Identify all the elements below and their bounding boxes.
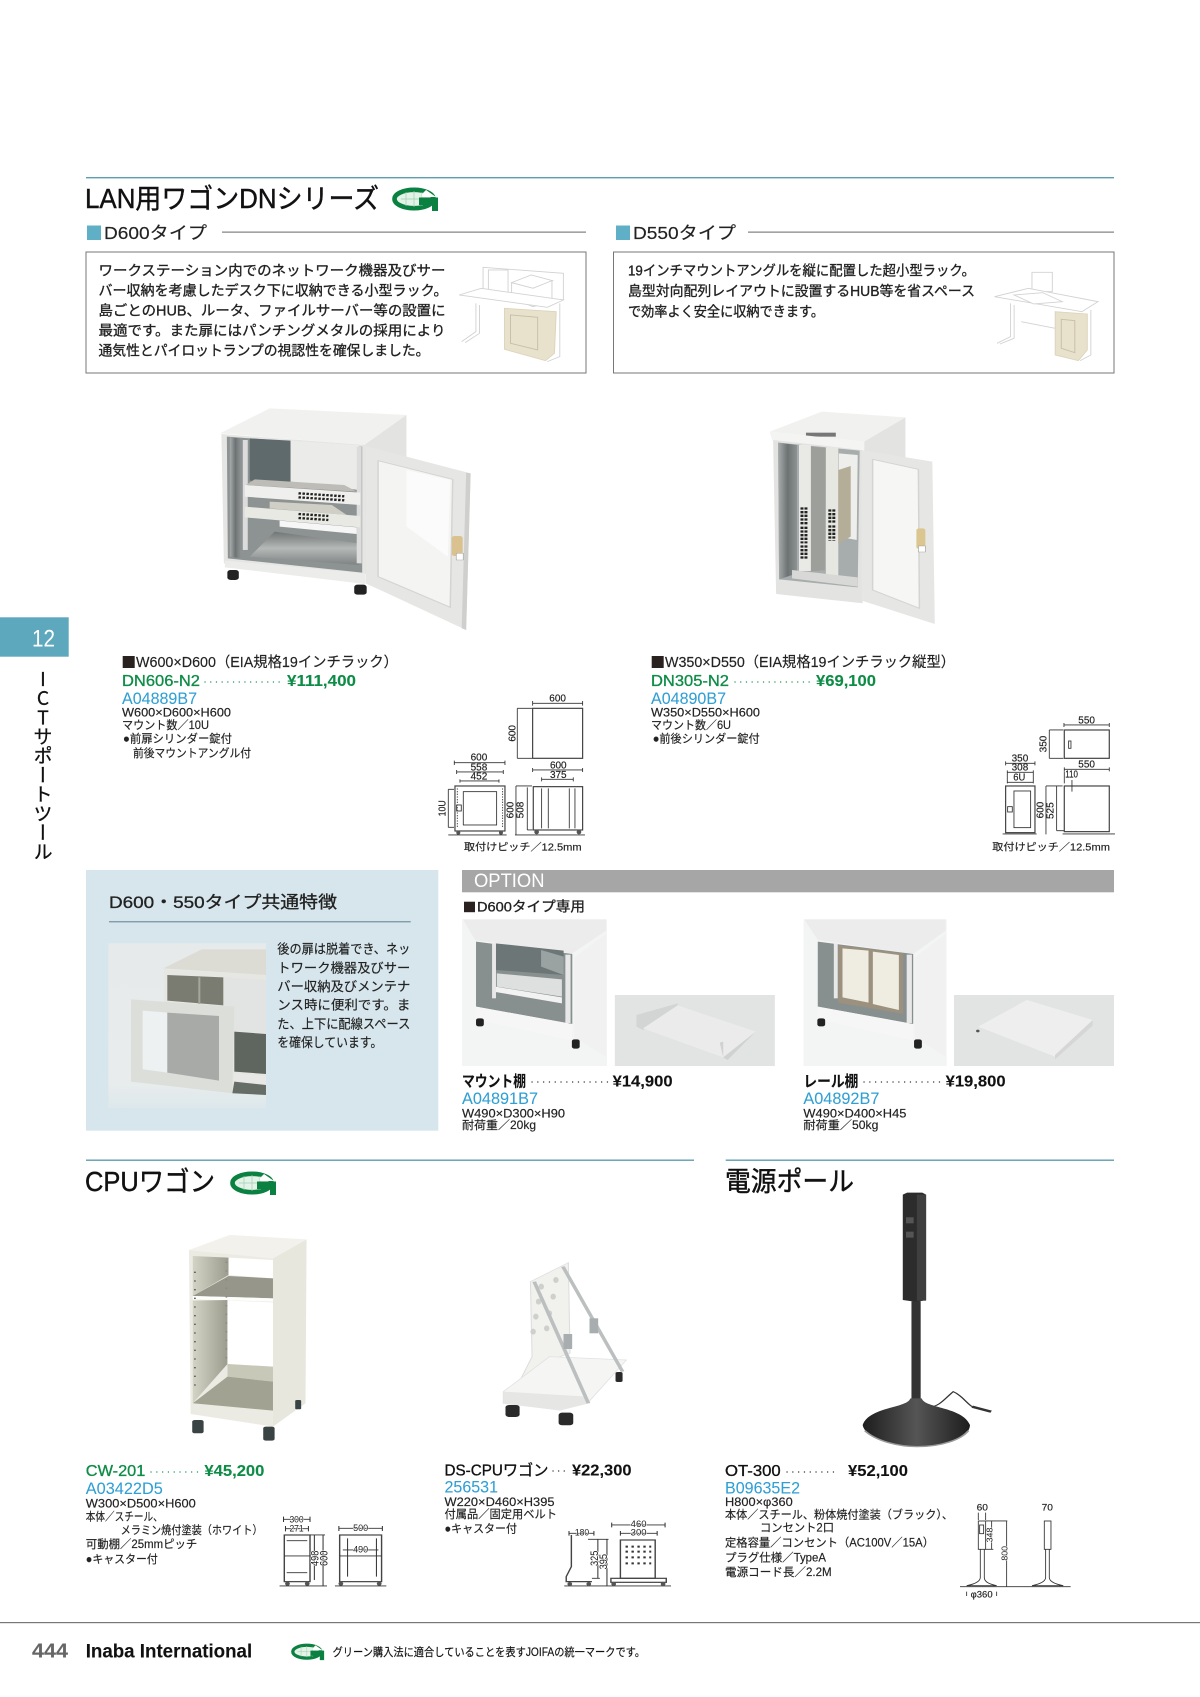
text block: D550 description: で効率よく安全に収納できます。 [628,304,824,320]
dimension drawing: DS-CPU wagon: 300 [631,1528,647,1538]
product block: CW-201: ●キャスター付 [86,1553,158,1566]
product block: rail shelf: 耐荷重／50kg [803,1118,878,1132]
dimension drawing: DN606-N2: 10U [438,800,449,816]
text block: D600 description: 島ごとのHUB、ルータ、ファイルサーバー等の設置に [98,302,445,320]
product block: CW-201 [86,1463,264,1566]
dimension drawing: DN606-N2: 600 [508,725,519,742]
product block: DN606-N2: マウント数／10U [122,718,209,732]
dimension drawing: DN305-N2: 308 [1012,763,1028,774]
dimension drawing: DN305-N2: 6U [1013,773,1025,784]
dimension drawing: DN305-N2: 525 [1045,802,1056,819]
product block: DS-CPU wagon: DS-CPUワゴン [444,1460,548,1479]
product photo: DN305-N2 vertical rack [770,412,935,624]
section rule: power pole [726,1160,1114,1161]
product block: CW-201: ¥45,200 [204,1463,264,1480]
dimension drawing: CW-201: 498 [310,1550,322,1566]
dimension drawing: OT-300: 70 [1042,1503,1053,1513]
text block: D600 description: 最適です。また扉にはパンチングメタルの採用により [98,322,446,340]
product photo: DN606-N2 open rack [220,408,471,630]
footer: green mark note: グリーン購入法に適合していることを表すJOIFAの統一マークです。 [333,1645,645,1659]
product block: OT-300: プラグ仕様／TypeA [725,1551,826,1565]
dimension drawing: DS-CPU wagon [564,1520,671,1586]
product block: rail shelf: レール棚 [803,1073,858,1091]
photo: rack with mount shelf [462,919,607,1066]
product photo: OT-300 power pole [863,1193,991,1447]
product photo: CW-201 wagon [189,1235,307,1441]
dimension drawing: DN606-N2: 375 [550,770,567,781]
dimension drawing: DN305-N2: 550 [1078,760,1095,771]
product block: CW-201: メラミン焼付塗装（ホワイト） [121,1523,263,1537]
text block: common features: た、上下に配線スペース [277,1016,410,1031]
dimension drawing: CW-201 [280,1515,386,1586]
section rule: LAN wagon [86,177,1114,178]
dimension drawing: DN305-N2: 110 [1065,770,1078,781]
text block: D600 description: ワークステーション内でのネットワーク機器及びサー [98,262,446,280]
footer rule [0,1622,1200,1623]
dimension drawing: OT-300: 60 [977,1503,988,1513]
dimension drawing: DS-CPU wagon: 460 [631,1520,647,1530]
product block: DN606-N2: W600×D600×H600 [122,707,231,720]
product block: DN305-N2: DN305-N2 [651,673,729,690]
dimension drawing: DS-CPU wagon: 395 [598,1554,610,1569]
dimension drawing: CW-201: 500 [353,1524,368,1534]
product block: OT-300: 本体／スチール、粉体焼付塗装（ブラック）、 [725,1507,953,1521]
product block: rail shelf: W490×D400×H45 [803,1108,906,1121]
product block: DS-CPU wagon: ●キャスター付 [444,1523,517,1536]
dimension drawing: DN606-N2: 600 [506,802,517,818]
product block: CW-201: W300×D500×H600 [86,1498,196,1511]
dimension drawing: DN305-N2 [992,715,1115,854]
icon: green mark logo [394,190,438,211]
product block: DS-CPU wagon: 256531 [444,1479,498,1497]
product block: OT-300: 定格容量／コンセント（AC100V／15A） [725,1536,934,1550]
product block: DN606-N2: DN606-N2 [122,673,200,690]
icon: green mark logo [293,1645,324,1660]
dimension drawing: DN305-N2: 350 [1039,736,1050,752]
product block: OT-300: ¥52,100 [848,1463,908,1480]
product block: mount shelf: マウント棚 [462,1073,526,1091]
title: CPUワゴン: CPUワゴン [85,1166,215,1197]
dimension drawing: DN606-N2: 600 [550,760,567,771]
product block: DN606-N2: ●前扉シリンダー錠付 [123,732,232,746]
product block: CW-201: CW-201 [86,1463,145,1480]
text block: D550 description [628,262,975,320]
dimension drawing: DN606-N2: 508 [516,802,527,818]
product block: DS-CPU wagon: ¥22,300 [572,1462,632,1479]
dimension drawing: CW-201: 600 [319,1550,331,1566]
dimension drawing: CW-201: 271 [289,1524,304,1534]
product block: OT-300 [725,1463,953,1579]
text block: common features: トワーク機器及びサー [277,960,410,975]
heading: D550 type [616,223,1114,243]
product block: DS-CPU wagon: W220×D460×H395 [444,1496,554,1509]
product block: DS-CPU wagon: 付属品／固定用ベルト [444,1508,557,1521]
dimension drawing: DS-CPU wagon: 325 [589,1550,601,1566]
dimension drawing: DS-CPU wagon: 180 [575,1528,589,1538]
product block: mount shelf: A04891B7 [462,1090,538,1108]
dimension drawing: CW-201: 300 [289,1515,304,1525]
product block: OT-300: OT-300 [725,1463,781,1480]
product block: rail shelf [803,1073,1006,1132]
heading: D550 type: D550タイプ [633,223,737,243]
dimension drawing: DN305-N2: 取付けピッチ／12.5mm [992,841,1110,854]
product block: OT-300: 電源コード長／2.2M [725,1565,832,1579]
text block: common features: を確保しています。 [277,1035,382,1050]
text block: D600 description: 通気性とパイロットランプの視認性を確保しました。 [98,342,430,360]
product block: CW-201: 可動棚／25mmピッチ [86,1537,197,1551]
dimension drawing: DN606-N2: 452 [471,772,487,783]
product block: DN606-N2: W600×D600（EIA規格19インチラック） [136,654,398,671]
dimension drawing: DN606-N2: 600 [549,693,566,704]
product block: OT-300: H800×φ360 [725,1496,793,1509]
dimension drawing: OT-300 [960,1503,1071,1599]
sidebar: chapter number tab [0,617,69,657]
product block: DN606-N2: 前後マウントアングル付 [133,746,251,760]
icon: desk with D600 rack [459,267,563,362]
product block: DN606-N2: ¥111,400 [287,673,356,690]
text block: D600 description: バー収納を考慮したデスク下に収納できる小型ラック。 [98,282,448,300]
product block: DN305-N2: ●前後シリンダー錠付 [653,732,760,746]
dimension drawing: DN606-N2: 558 [471,763,487,774]
panel: common features [86,870,438,1131]
panel: D550 description [614,252,1114,373]
section rule: CPU wagon [86,1160,694,1161]
footer: page number: 444 [32,1640,69,1662]
dimension drawing: DN305-N2: 550 [1078,715,1095,726]
heading: D600 type: D600タイプ [104,223,208,243]
sidebar: vertical chapter label: ICTサポートツール [29,669,57,861]
product block: DN606-N2: A04889B7 [122,690,197,708]
dimension drawing: OT-300: 348 [984,1527,994,1542]
icon: green mark logo [232,1174,276,1195]
heading: common features: D600・550タイプ共通特徴 [109,893,337,912]
photo: rack with rail shelf [803,919,947,1066]
product block: rail shelf: ¥19,800 [946,1074,1006,1091]
dimension drawing: DN606-N2 [438,693,585,854]
product block: CW-201: A03422D5 [86,1480,163,1498]
dimension drawing: OT-300: φ360 [971,1589,993,1599]
text block: common features: ンス時に便利です。ま [277,998,410,1013]
dimension drawing: DN305-N2: 600 [1035,802,1046,818]
dimension drawing: DN606-N2: 取付けピッチ／12.5mm [464,841,582,854]
dimension drawing: CW-201: 490 [353,1545,368,1555]
product block: mount shelf: 耐荷重／20kg [462,1118,536,1132]
dimension drawing: DN305-N2: 350 [1012,753,1028,764]
product block: DN305-N2: A04890B7 [651,690,726,708]
product block: OT-300: B09635E2 [725,1479,800,1497]
product photo: DS-CPU wagon [503,1263,626,1425]
heading: D600 type [87,223,586,243]
footer: brand name: Inaba International [86,1641,252,1662]
photo: rail shelf [954,995,1114,1066]
text block: D600 description [98,262,448,360]
sidebar: chapter number tab: 12 [32,626,55,652]
text block: common features: 後の扉は脱着でき、ネッ [277,940,410,956]
heading bar: OPTION [462,870,1114,892]
title: LAN用ワゴンDNシリーズ: LAN用ワゴンDNシリーズ [85,183,379,214]
product block: mount shelf [462,1073,673,1132]
text block: D550 description: 19インチマウントアングルを縦に配置した超小型ラック。 [628,262,975,280]
product block: CW-201: 本体／スチール、 [86,1510,163,1524]
text block: D550 description: 島型対向配列レイアウトに設置するHUB等を省スペース [628,282,975,300]
heading bar: OPTION: OPTION [474,871,544,892]
dimension drawing: OT-300: 800 [999,1546,1009,1561]
photo: mount shelf [615,995,775,1066]
product block: DN305-N2: マウント数／6U [651,718,731,732]
dimension drawing: DN606-N2: 600 [471,753,487,764]
product block: mount shelf: W490×D300×H90 [462,1108,565,1121]
icon: desk with D550 rack [994,272,1098,361]
product block: DN305-N2: W350×D550×H600 [651,707,760,720]
title: 電源ポール: 電源ポール [725,1167,854,1197]
text block: common features [277,940,410,1050]
photo: removable rear door [108,943,266,1108]
product block: DN305-N2: W350×D550（EIA規格19インチラック縦型） [665,654,955,671]
product block: DN305-N2 [651,654,955,746]
product block: rail shelf: A04892B7 [803,1090,879,1108]
text block: common features: バー収納及びメンテナ [277,979,410,994]
product block: OT-300: コンセント2口 [760,1522,834,1535]
subheading: D600 only: D600タイプ専用 [477,900,585,916]
product block: DS-CPU wagon [444,1460,632,1536]
product block: mount shelf: ¥14,900 [613,1074,673,1091]
product block: DN606-N2 [122,654,398,760]
panel: D600 description [86,252,586,373]
product block: DN305-N2: ¥69,100 [816,673,876,690]
